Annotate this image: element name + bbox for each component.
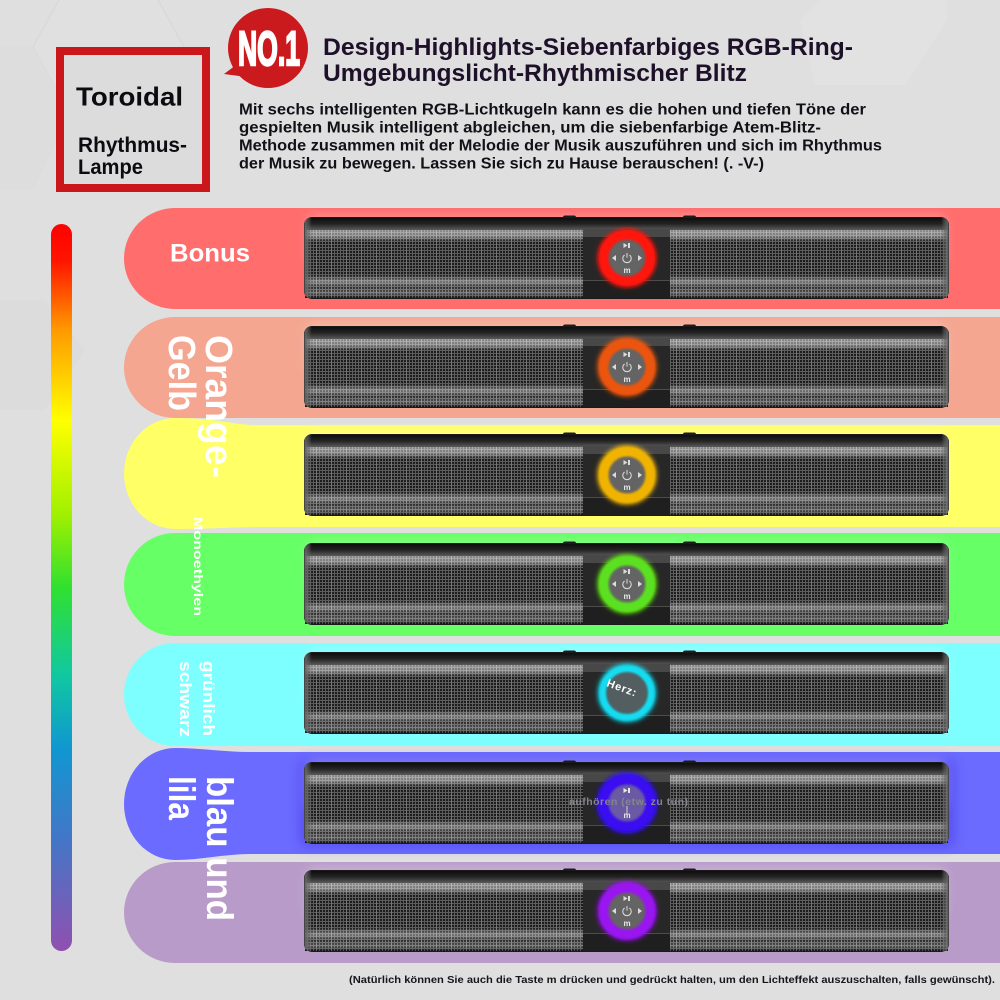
panel: yellow row [124, 418, 1000, 529]
label: Bonus: Bonus [170, 240, 250, 268]
panel: green row [124, 533, 1000, 636]
speaker with cyan ring [304, 649, 949, 734]
panel: orange row [124, 317, 1000, 418]
badge: NO.1 speech bubble: NO.1 [238, 23, 300, 76]
speaker with blue ring: m [623, 811, 631, 820]
label: Lampe: Lampe [78, 155, 143, 179]
label: Orange-Gelb: Gelb [160, 335, 202, 411]
label: Toroidal: Toroidal [76, 82, 183, 112]
description text block: gespielten Musik intelligent abgleichen, um die siebenfarbige Atem-Blitz- [239, 120, 821, 136]
description text block [239, 102, 882, 172]
label: Orange-Gelb [160, 335, 239, 478]
speaker with purple ring [304, 867, 949, 952]
panel: cyan row [124, 643, 1000, 746]
speaker with orange ring: m [623, 375, 631, 384]
description text block: Methode zusammen mit der Melodie der Musik auszuführen und sich im Rhythmus [239, 138, 882, 154]
speaker with yellow ring [304, 431, 949, 516]
badge: NO.1 speech bubble [224, 8, 308, 88]
label: Monoethylen: Monoethylen [191, 517, 205, 616]
footnote: (Natürlich können Sie auch die Taste m drücken und gedrückt halten, um den Lichteffekt auszuschalten, falls gewünscht). [349, 975, 995, 986]
label: Orange-Gelb: Orange- [197, 335, 239, 478]
label box: Toroidal Rhythmus-Lampe [60, 51, 206, 188]
speaker with green ring: m [623, 592, 631, 601]
speaker with green ring [304, 540, 949, 625]
title: Design-Highlights-Siebenfarbiges RGB-Ring- [323, 34, 853, 61]
label: Rhythmus-: Rhythmus- [78, 133, 187, 157]
rainbow gradient bar [51, 224, 72, 951]
title [323, 34, 853, 87]
label: grünlich schwarz: grünlich [199, 661, 218, 736]
description text block: der Musik zu bewegen. Lassen Sie sich zu Hause berauschen! (. -V-) [239, 156, 764, 172]
label: aufhören overlay: aufhören (etw. zu tun) [569, 796, 688, 808]
title: Umgebungslicht-Rhythmischer Blitz [323, 60, 747, 87]
speaker with yellow ring: m [623, 483, 631, 492]
label: blau und lila: lila [161, 776, 202, 820]
speaker with orange ring [304, 323, 949, 408]
description text block: Mit sechs intelligenten RGB-Lichtkugeln kann es die hohen und tiefen Töne der [239, 102, 866, 118]
speaker with red ring [304, 214, 949, 299]
label: grünlich schwarz: schwarz [176, 661, 195, 737]
panel: purple row [124, 862, 1000, 963]
label: blau und lila [161, 776, 240, 921]
label: Herz: Herz: [605, 678, 639, 700]
label: grünlich schwarz [176, 661, 218, 737]
speaker with red ring: m [623, 266, 631, 275]
panel: red row [124, 208, 1000, 309]
label: blau und lila: blau und [199, 776, 240, 921]
panel: blue row [124, 748, 1000, 860]
speaker with purple ring: m [623, 919, 631, 928]
speaker with blue ring [304, 759, 949, 844]
